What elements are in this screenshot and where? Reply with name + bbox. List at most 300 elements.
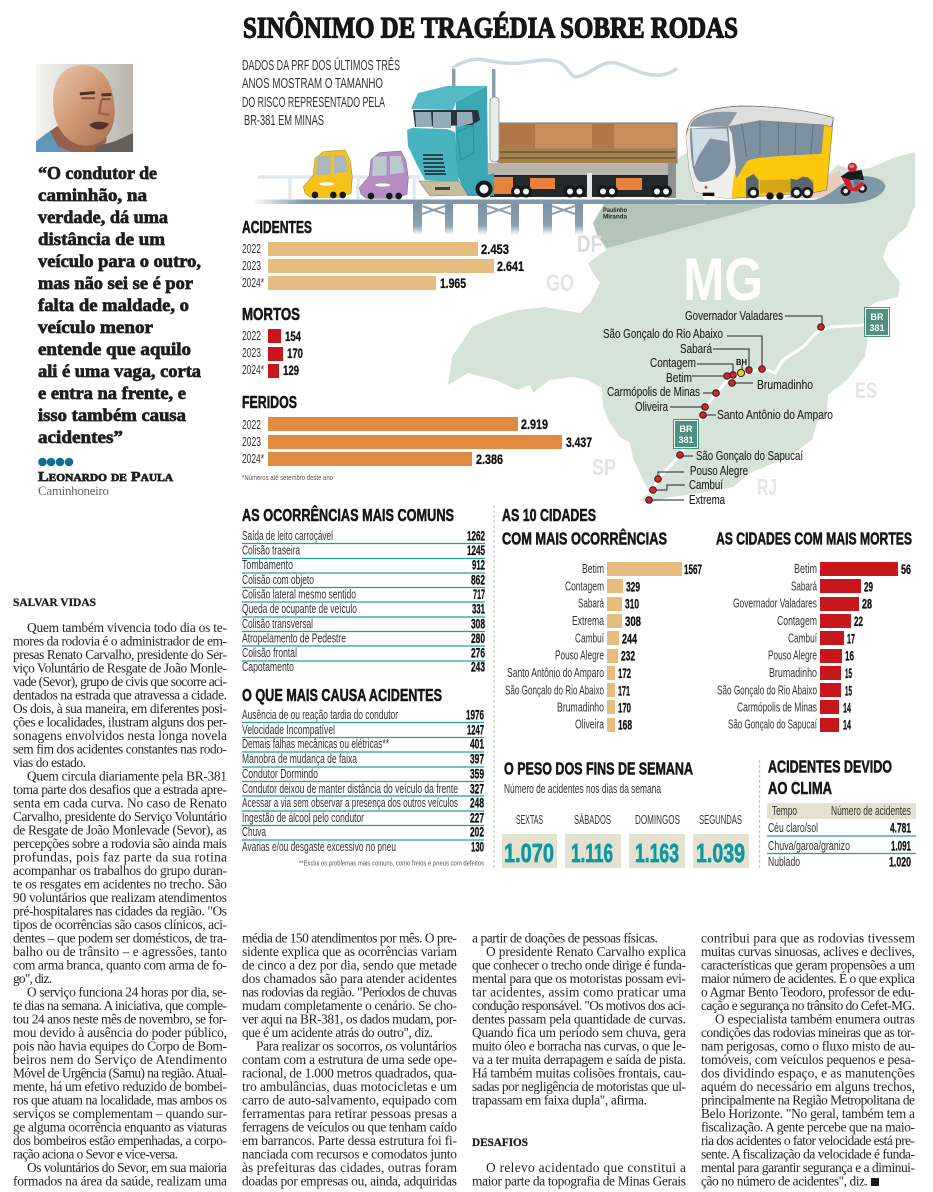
article column 4: ria dos acidentes o fator velocidade está pre- [701,1133,915,1148]
panel: cidades com mais mortes: 28 [862,597,872,612]
article column 2: em barrancos. Parte dessa estrutura foi fi- [242,1133,457,1148]
article column 1: senta em cada curva. No caso de Renato [13,796,227,810]
article column 4: principalmente na Região Metropolitana de [701,1092,915,1108]
state labels: SP [592,454,616,480]
article column 1: Quem circula diariamente pela BR-381 [27,768,227,784]
panel: ocorrências mais comuns: Colisão traseira [242,542,300,558]
panel: acidentes devido ao clima [767,756,916,870]
panel: o peso dos fins de semana: 1.163 [635,838,679,868]
panel: o que mais causa acidentes [242,685,484,868]
article column 3: que conhecer o trecho onde dirige é funda- [472,958,686,972]
panel: o que mais causa acidentes: 130 [471,840,484,854]
panel: 10 cidades com mais ocorrências: 171 [618,683,630,698]
panel: o que mais causa acidentes: Chuva [242,824,266,839]
panel: acidentes devido ao clima: 4.781 [890,820,911,836]
cargo [498,123,677,163]
panel: cidades com mais mortes: Betim [794,561,817,576]
panel: mortos chart: 129 [283,363,299,378]
panel: o peso dos fins de semana: 1.116 [571,838,613,868]
article column 1: tipos de ocorrências são casos clínicos, aci- [13,917,227,932]
panel: ocorrências mais comuns: Tombamento [242,557,293,572]
article column 1: te os resgates em acidentes no trecho. São [13,876,227,892]
panel: 10 cidades com mais ocorrências: 168 [618,718,632,733]
article column 2: dos chamados são para atender acidentes [242,971,457,986]
panel: feridos chart: 2022 [242,417,261,432]
pull quote: mas não sei se é por [38,273,193,293]
city labels: Cambuí [689,478,723,492]
panel: o peso dos fins de semana: O PESO DOS FINS DE SEMANA [504,758,693,778]
panel: o que mais causa acidentes: 202 [470,824,484,840]
article column 1: dentados na estrada que atravessa a cidade. [13,688,227,702]
illustration: yellow car [303,150,352,198]
article column 2: nas rodovias da região. "Períodos de chuvas [242,984,457,1000]
panel: mortos chart: 154 [285,329,301,344]
article column 4: O especialista também enumera outras [715,1012,915,1026]
panel: acidentes chart: 2.453 [481,242,509,257]
panel: cidades com mais mortes: Contagem [777,613,817,628]
article column 1: mente, há um efetivo reduzido de bombei- [13,1079,227,1094]
article column 1: Quem também vivencia todo dia os te- [27,620,227,635]
city labels: São Gonçalo do Rio Abaixo [603,327,723,341]
article column 3: tar acidentes, assim como praticar uma [472,984,686,1000]
article column 4: o Agmar Bento Teodoro, professor de edu- [701,984,915,1000]
panel: acidentes chart: 2023 [242,258,261,273]
article column 1: percepções sobre a rodovia são ainda mais [13,836,227,851]
panel: mortos chart: MORTOS [242,304,300,324]
panel: o que mais causa acidentes: Demais falhas mecânicas ou elétricas** [242,736,389,751]
panel: o que mais causa acidentes: Ingestão de álcool pelo condutor [242,810,364,825]
panel: mortos chart: 2024* [242,362,264,377]
panel: acidentes chart: 2.641 [497,259,524,274]
illustrator signature: Paulinho [603,208,627,214]
muffler [490,97,499,162]
panel: feridos chart: 2024* [242,451,264,466]
article column 1: ge alguma ocorrência enquanto as viaturas [13,1120,227,1134]
city labels: Extrema [689,493,725,507]
pull quote [38,163,201,447]
pull quote: caminhão, na [38,185,147,205]
article column 3: mental para que os motoristas possam evi- [472,971,686,986]
panel: cidades com mais mortes: 14 [843,718,851,733]
pull quote: ali é uma vaga, corta [38,361,201,381]
article column 4: maior número de acidentes. É o que explica [701,971,915,986]
article column 2: às prefeituras das cidades, outras foram [242,1160,458,1175]
article column 2: média de 150 atendimentos por mês. O pre- [242,930,457,946]
city labels: Oliveira [635,400,668,414]
illustration: purple car [359,151,408,199]
panel: ocorrências mais comuns: Capotamento [242,659,294,674]
article column 1: beiros nem do Serviço de Atendimento [13,1052,227,1067]
panel: 10 cidades com mais ocorrências: 172 [618,666,631,681]
city labels: Brumadinho [757,378,813,392]
article column 1: vias do estado. [13,755,86,770]
panel: 10 cidades com mais ocorrências: AS 10 CIDADES [502,505,596,525]
article column 1: viço Voluntário de Resgate de João Monle- [13,660,227,676]
panel: acidentes chart [242,217,524,291]
article column 4 [701,930,916,1188]
cab [455,86,494,196]
panel: 10 cidades com mais ocorrências: Sabará [578,596,604,611]
panel: 10 cidades com mais ocorrências: Santo Antônio do Amparo [507,665,604,680]
panel: o que mais causa acidentes: **Exclui os problemas mais comuns, como freios e pneus com defeitos [299,858,484,868]
panel: cidades com mais mortes: 56 [901,562,911,577]
article column 2: de cinco a dez por dia, sendo que metade [242,958,457,972]
article column 1: 90 voluntários que realizam atendimentos [13,890,227,905]
state labels: GO [546,270,574,297]
panel: cidades com mais mortes: São Gonçalo do Sapucaí [728,717,817,732]
panel: o que mais causa acidentes: Condutor deixou de manter distância do veículo da frente [242,781,458,796]
portrait photo [36,64,133,152]
panel: acidentes devido ao clima: Nublado [768,854,800,869]
article column 3: O presidente Renato Carvalho explica [486,944,686,959]
panel: 10 cidades com mais ocorrências: Betim [582,561,604,576]
article column 2: ferramentas para retirar pessoas presas a [242,1106,457,1121]
panel: cidades com mais mortes: 29 [864,579,873,594]
panel: mortos chart: 170 [287,346,303,361]
panel: ocorrências mais comuns: Colisão lateral mesmo sentido [242,586,356,602]
article column 2: tro ambulâncias, duas motocicletas e um [242,1079,458,1094]
article column 3: va a ter muita derrapagem e saída de pista. [472,1052,686,1067]
article column 1: ros que atuam na localidade, mas ambos os [13,1092,227,1108]
panel: 10 cidades com mais ocorrências: 310 [625,597,639,612]
wheels [476,180,672,198]
article column 4: mental para garantir segurança e a diminui- [701,1160,915,1175]
panel: 10 cidades com mais ocorrências: Contagem [565,578,604,593]
panel: acidentes chart: 2022 [242,241,261,256]
article column 1: formados na área da saúde, realizam uma [13,1174,227,1188]
panel: acidentes devido ao clima: 1.091 [891,838,911,854]
panel: cidades com mais mortes: Carmópolis de Minas [737,699,817,714]
article column 4: ção no número de acidentes", diz. [701,1174,868,1188]
panel: feridos chart: 3.437 [566,435,592,450]
city labels: Pouso Alegre [690,464,748,478]
article column 4: Belo Horizonte. "No geral, também tem a [701,1106,915,1121]
leader lines [652,316,822,500]
panel: 10 cidades com mais ocorrências: 232 [621,649,635,664]
panel: acidentes devido ao clima: Chuva/garoa/granizo [768,838,850,853]
panel: cidades com mais mortes: Brumadinho [769,665,817,680]
panel: acidentes devido ao clima: Tempo [772,803,797,818]
article column 1: dos bombeiros estão empenhadas, a corpo- [13,1133,227,1148]
article column 3: trapassam em faixa dupla", afirma. [472,1092,647,1108]
article column 3 [472,930,686,1188]
panel: ocorrências mais comuns: 276 [471,646,485,660]
city labels: Carmópolis de Minas [607,385,700,399]
article column 2: nanciada com recursos e comodatos junto [242,1146,457,1162]
article column 2: que é um acidente atrás do outro", diz. [242,1025,433,1040]
panel: o que mais causa acidentes: 1247 [467,722,484,738]
article column 1: balho ou de trânsito – e agressões, tanto [13,944,227,959]
panel: cidades com mais mortes: 16 [845,649,854,664]
panel: acidentes chart: 1.965 [440,276,466,291]
panel: ocorrências mais comuns: Colisão frontal [242,645,297,660]
panel: 10 cidades com mais ocorrências: Oliveira [575,717,604,732]
road sign BR-381 east: BR [870,312,884,322]
panel: cidades com mais mortes: Governador Valadares [733,596,817,611]
article column 1: Os dois, à sua maneira, em diferentes posi- [13,701,227,716]
panel: 10 cidades com mais ocorrências: Extrema [572,613,605,628]
road sign BR-381 east [864,307,890,337]
article column 2: carro de auto-salvamento, equipado com [242,1092,458,1108]
city labels: BH [736,357,747,367]
article column 1: Móvel de Urgência (Samu) na região. Atual- [13,1066,227,1080]
article column 1: sem fim dos acidentes constantes nas rodo- [13,742,227,756]
pull quote: veículo menor [38,317,153,337]
article column 2: racional, de 1.000 metros quadrados, qua- [242,1066,457,1080]
article column 4: nam perigosas, como o fluxo misto de au- [701,1038,915,1054]
panel: ocorrências mais comuns: 717 [473,587,485,602]
article column 4: fiscalização. A gente percebe que na maio- [701,1120,915,1134]
subtitle [242,57,400,129]
article column 1: serviços se complementam – quando sur- [13,1106,227,1121]
illustration: motorcycle [841,163,867,196]
article column 1: Carvalho, presidente do Serviço Voluntário [13,809,227,824]
panel: cidades com mais mortes: 17 [847,631,855,646]
subtitle: BR-381 EM MINAS [244,113,324,129]
pull quote: distância de um [38,229,165,249]
fenders [493,177,642,194]
article column 2: ver aqui na BR-381, os dados mudam, por- [242,1012,457,1026]
quote attribution [38,458,174,498]
pull quote: e entra na frente, e [38,383,186,403]
subheading: desafios: DESAFIOS [472,1137,528,1149]
panel: cidades com mais mortes: 22 [854,614,863,629]
panel: o peso dos fins de semana: SEXTAS [516,812,543,827]
panel: o peso dos fins de semana: 1.070 [504,838,554,868]
panel: o peso dos fins de semana: Número de acidentes nos dias da semana [504,781,661,796]
panel: cidades com mais mortes: Pouso Alegre [768,648,817,663]
state labels: DF [577,231,602,258]
panel: o que mais causa acidentes: 1976 [466,708,484,722]
panel: o que mais causa acidentes: O QUE MAIS CAUSA ACIDENTES [242,685,442,705]
panel: 10 cidades com mais ocorrências: 1567 [684,562,702,577]
article column 3: muito óleo e borracha nas curvas, o que le- [472,1038,686,1054]
article column 2: sidente explica que as ocorrências variam [242,944,458,959]
panel: ocorrências mais comuns: 280 [471,631,485,646]
panel: ocorrências mais comuns: Queda de ocupante de veículo [242,601,357,616]
smoke [452,59,677,77]
state labels [546,231,877,500]
city labels: Contagem [650,356,696,370]
article column 2: Para realizar os socorros, os voluntários [256,1038,457,1054]
panel: o que mais causa acidentes: 227 [470,810,484,826]
article column 3: condução responsável. "Os motivos dos aci- [472,998,686,1013]
article column 1: pré-hospitalares nas cidades da região. "Os [13,904,227,918]
city labels: São Gonçalo do Sapucaí [696,449,803,463]
article column 2: doadas por empresas ou, ainda, adquiridas [242,1174,457,1188]
panel: o que mais causa acidentes: Manobra de mudança de faixa [242,751,357,766]
pull quote: verdade, dá uma [38,207,168,227]
article column 4: aquém do necessário em alguns trechos, [701,1079,915,1094]
article column 1: vade (Sevor), grupo de civis que socorre aci- [13,674,227,689]
panel: cidades com mais mortes [716,528,912,733]
panel: 10 cidades com mais ocorrências: São Gonçalo do Rio Abaixo [505,682,604,697]
bumper [419,181,468,196]
panel: o que mais causa acidentes: Avarias e/ou desgaste excessivo no pneu [242,839,396,854]
article column 4: dos dividindo espaço, e as manutenções [701,1066,915,1080]
panel: o que mais causa acidentes: 401 [470,736,484,752]
illustration: truck [407,69,677,198]
article column 1: te dias na semana. A iniciativa, que comple- [13,998,227,1013]
panel: acidentes devido ao clima: Céu claro/sol [768,820,818,835]
panel: o peso dos fins de semana [502,758,749,868]
panel: ocorrências mais comuns: 243 [471,660,485,674]
article column 1: ções e localidades, ilustram alguns dos per- [13,714,227,730]
panel: feridos chart [242,392,592,482]
city labels: Governador Valadares [685,309,783,323]
road sign BR-381 south: 381 [678,435,694,445]
panel: ocorrências mais comuns: 912 [472,558,485,572]
article column 4: contribui para que as rodovias tivessem [701,930,916,946]
article column 1 [13,597,227,1188]
panel: o peso dos fins de semana: DOMINGOS [635,812,680,827]
article column 4: sente. A fiscalização da velocidade é funda- [701,1146,915,1162]
panel: acidentes chart: 2024* [242,275,264,290]
article column 1: pois não havia equipes do Corpo de Bom- [13,1038,227,1054]
city labels: Sabará [680,342,712,356]
article column 3: dentes passam pela quantidade de curvas. [472,1012,686,1026]
road sign BR-381 east: 381 [869,323,885,333]
article column 1: dentes – que podem ser domésticos, de tra- [13,930,227,946]
panel: cidades com mais mortes: Sabará [791,578,817,593]
panel: ocorrências mais comuns: 1245 [467,543,485,558]
article column 2: mudam completamente o cenário. Se cho- [242,998,457,1013]
article column 1: de Resgate de João Monlevade (Sevor), as [13,822,227,838]
grille [423,155,446,174]
pull quote: “O condutor de [38,163,157,183]
article column 3: Quando fica um período sem chuva, gera [472,1025,686,1040]
article column 1: com arma branca, quanto com arma de fo- [13,958,227,972]
panel: feridos chart: *Números até setembro deste ano [242,473,333,482]
article column 4: tomóveis, com veículos pequenos e pesa- [701,1052,915,1067]
panel: o peso dos fins de semana: SEGUNDAS [699,812,742,827]
panel: cidades com mais mortes: Cambuí [788,630,817,645]
panel: cidades com mais mortes: 15 [845,666,852,681]
article column 1: toma parte dos desafios que a estrada apre- [13,782,227,797]
illustrator signature [603,208,628,220]
panel: cidades com mais mortes: 14 [843,700,851,715]
panel: ocorrências mais comuns: 862 [471,572,485,588]
panel: feridos chart: FERIDOS [242,392,297,412]
panel: 10 cidades com mais ocorrências: 308 [625,614,641,629]
map of Minas Gerais [448,150,915,507]
article column 4: muitas curvas sinuosas, aclives e declives, [701,944,915,959]
pull quote: isso também causa [38,405,186,425]
panel: o que mais causa acidentes: 359 [470,766,484,782]
panel: feridos chart: 2.386 [476,452,503,467]
subtitle: DO RISCO REPRESENTADO PELA [242,95,385,111]
panel: o que mais causa acidentes: Acessar a via sem observar a presença dos outros veículos [242,795,458,810]
article column 1: sonagens envolvidos nesta longa novela [13,728,227,743]
article column 4: características que geram propensões a um [701,958,916,972]
title: SINÔNIMO DE TRAGÉDIA SOBRE RODAS [243,12,738,44]
panel: mortos chart: 2022 [242,328,261,343]
article column 1: mores da rodovia é o administrador de em- [13,634,227,648]
article column 2: ferragens de veículos ou que tenham caído [242,1120,457,1134]
panel: cidades com mais mortes: 15 [845,683,852,698]
exhaust stacks [452,69,496,99]
panel: o que mais causa acidentes: 327 [470,782,484,796]
panel: ocorrências mais comuns: Saída de leito carroçável [242,528,333,543]
article column 3: maior parte da topografia de Minas Gerais [472,1174,686,1188]
panel: o peso dos fins de semana: 1.039 [696,838,745,868]
pull quote: falta de maldade, o [38,295,189,315]
article column 1: mou devido à ausência do poder público, [13,1025,227,1040]
road sign BR-381 south [673,419,699,449]
article column 4: condições das rodovias mineiras que as tor- [701,1025,915,1040]
panel: 10 cidades com mais ocorrências: 329 [626,579,640,594]
panel: 10 cidades com mais ocorrências: Pouso Alegre [555,648,604,663]
article column 1: profundas, pois faz parte da sua rotina [13,850,227,864]
article column 1: tou 24 anos neste mês de novembro, se for- [13,1012,227,1026]
article column 1: acompanhar os trabalhos do grupo duran- [13,863,227,878]
article column 3: sadas por negligência de motoristas que ul- [472,1079,686,1094]
panel: ocorrências mais comuns: 1262 [467,528,485,544]
panel: ocorrências mais comuns: 308 [471,616,485,632]
panel: ocorrências mais comuns: Atropelamento de Pedestre [242,630,346,646]
quote attribution: Caminhoneiro [38,483,109,498]
panel: mortos chart: 2023 [242,345,261,360]
article column 4: cação e segurança no trânsito do Cefet-MG. [701,998,915,1013]
illustration: bridge and road [253,176,885,235]
state labels: ES [855,378,877,403]
state labels: RJ [757,474,777,500]
state labels: MG [683,246,763,313]
end mark [871,1178,879,1186]
panel: ocorrências mais comuns: Colisão transversal [242,616,313,631]
city labels: Betim [666,371,692,385]
article column 3: Há também muitas colisões frontais, cau- [472,1066,686,1080]
panel: 10 cidades com mais ocorrências: Cambuí [575,630,604,645]
illustrator signature: Miranda [603,214,628,220]
article column 3: a partir de doações de pessoas físicas. [472,930,658,946]
article column 1: presas Renato Carvalho, presidente do Ser- [13,647,227,662]
panel: mortos chart [242,304,303,378]
pull quote: veículo para o outro, [38,251,201,271]
panel: feridos chart: 2.919 [521,417,548,432]
panel: acidentes devido ao clima: 1.020 [889,854,911,870]
panel: ocorrências mais comuns: AS OCORRÊNCIAS MAIS COMUNS [242,504,454,525]
panel: feridos chart: 2023 [242,434,261,449]
panel: 10 cidades com mais ocorrências: Brumadinho [557,699,604,714]
panel: ocorrências mais comuns: Colisão com objeto [242,572,314,587]
panel: ocorrências mais comuns [242,504,485,674]
panel: 10 cidades com mais ocorrências: 170 [618,700,631,715]
panel: ocorrências mais comuns: 331 [472,602,485,616]
panel: 10 cidades com mais ocorrências [502,505,702,733]
article column 2 [242,930,458,1188]
subheading: salvar vidas: SALVAR VIDAS [13,597,96,609]
trailer bed [488,163,672,175]
panel: o que mais causa acidentes: Velocidade Incompatível [242,722,335,737]
panel: o que mais causa acidentes: Condutor Dormindo [242,766,318,781]
panel: o que mais causa acidentes: 248 [470,796,484,810]
panel: acidentes chart: ACIDENTES [242,217,312,237]
pull quote: entende que aquilo [38,339,191,359]
panel: o que mais causa acidentes: 397 [470,752,484,766]
article column 1: ração aciona o Sevor e vice-versa. [13,1146,178,1162]
panel: acidentes devido ao clima: AO CLIMA [768,778,832,798]
subtitle: ANOS MOSTRAM O TAMANHO [242,76,383,92]
article column 1: O serviço funciona 24 horas por dia, se- [27,984,227,1000]
quote attribution: Leonardo de Paula [38,470,174,485]
illustration: bus [686,106,833,200]
panel: cidades com mais mortes: São Gonçalo do Rio Abaixo [717,682,817,697]
article column 1: Os voluntários do Sevor, em sua maioria [27,1160,227,1175]
subtitle: DADOS DA PRF DOS ÚLTIMOS TRÊS [242,57,400,74]
city labels [603,309,833,507]
article column 2: contam com a estrutura de uma sede ope- [242,1052,457,1067]
